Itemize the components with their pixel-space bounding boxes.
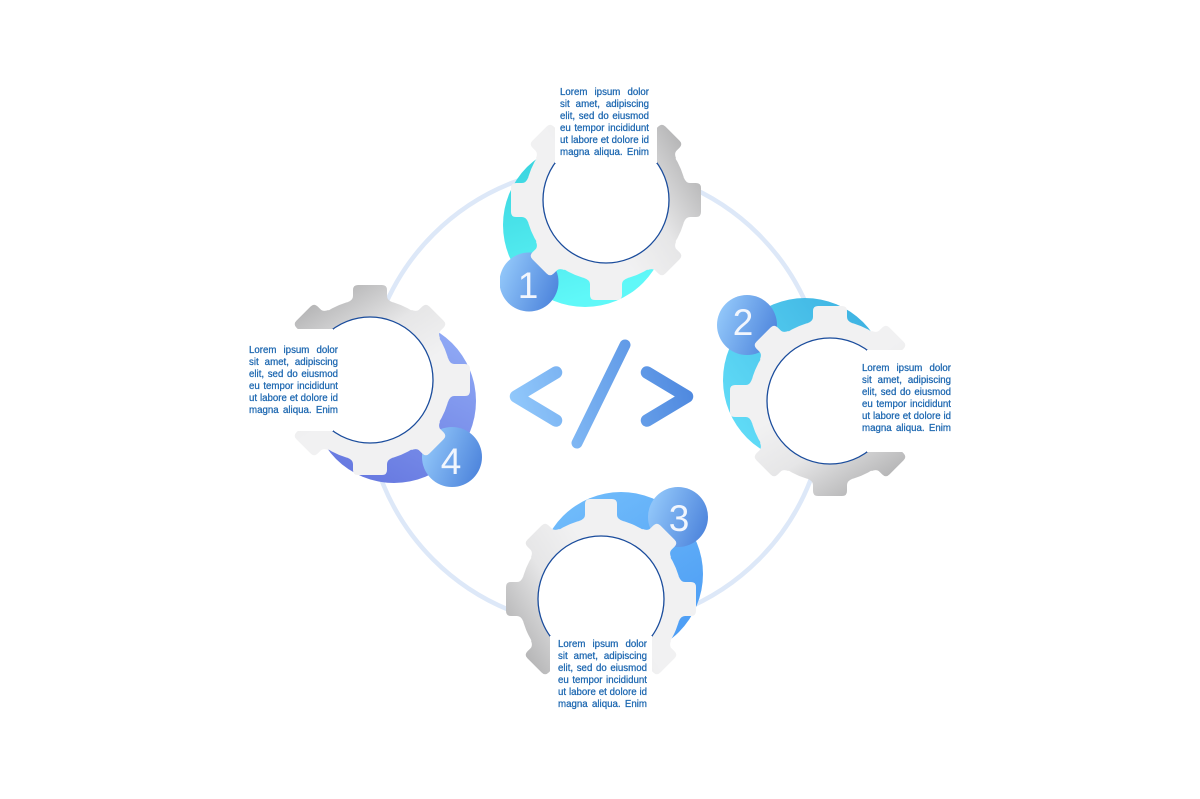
panel: step 3 — [506, 487, 708, 710]
text: step 3 description: magna aliqua. Enim — [558, 699, 647, 710]
text: step 4 description: sit amet, adipiscing — [249, 357, 338, 368]
text: step 1 description — [560, 87, 649, 158]
text: step 4 description: eu tempor incididunt — [249, 381, 338, 392]
text: step 1 description: ut labore et dolore id — [560, 135, 649, 146]
text: step 1 description: eu tempor incididunt — [560, 123, 649, 134]
panel: step 1 — [500, 87, 701, 312]
panel: step 1: 1 — [518, 265, 538, 306]
panel: step 2: 2 — [733, 302, 753, 343]
text: step 2 description — [862, 363, 951, 434]
panel: step 4: 4 — [441, 441, 461, 482]
text: step 3 description: elit, sed do eiusmod — [558, 663, 647, 674]
panel: step 4 — [249, 285, 482, 487]
text: step 1 description: elit, sed do eiusmod — [560, 111, 649, 122]
text: step 3 description: ut labore et dolore id — [558, 687, 647, 698]
text: step 1 description: sit amet, adipiscing — [560, 99, 649, 110]
text: step 2 description: Lorem ipsum dolor — [862, 363, 951, 374]
text: step 3 description: Lorem ipsum dolor — [558, 639, 647, 650]
panel: step 3: 3 — [669, 498, 689, 539]
text: step 3 description: sit amet, adipiscing — [558, 651, 647, 662]
text: step 4 description: Lorem ipsum dolor — [249, 345, 338, 356]
text: step 2 description: sit amet, adipiscing — [862, 375, 951, 386]
text: step 4 description — [249, 345, 338, 416]
text: step 4 description: ut labore et dolore id — [249, 393, 338, 404]
text: step 2 description: elit, sed do eiusmod — [862, 387, 951, 398]
text: step 3 description — [558, 639, 647, 710]
text: step 2 description: ut labore et dolore id — [862, 411, 951, 422]
text: step 4 description: magna aliqua. Enim — [249, 405, 338, 416]
text: step 3 description: eu tempor incididunt — [558, 675, 647, 686]
text: step 2 description: magna aliqua. Enim — [862, 423, 951, 434]
panel: step 2 — [717, 295, 951, 496]
text: step 1 description: Lorem ipsum dolor — [560, 87, 649, 98]
text: step 4 description: elit, sed do eiusmod — [249, 369, 338, 380]
text: step 2 description: eu tempor incididunt — [862, 399, 951, 410]
text: step 1 description: magna aliqua. Enim — [560, 147, 649, 158]
